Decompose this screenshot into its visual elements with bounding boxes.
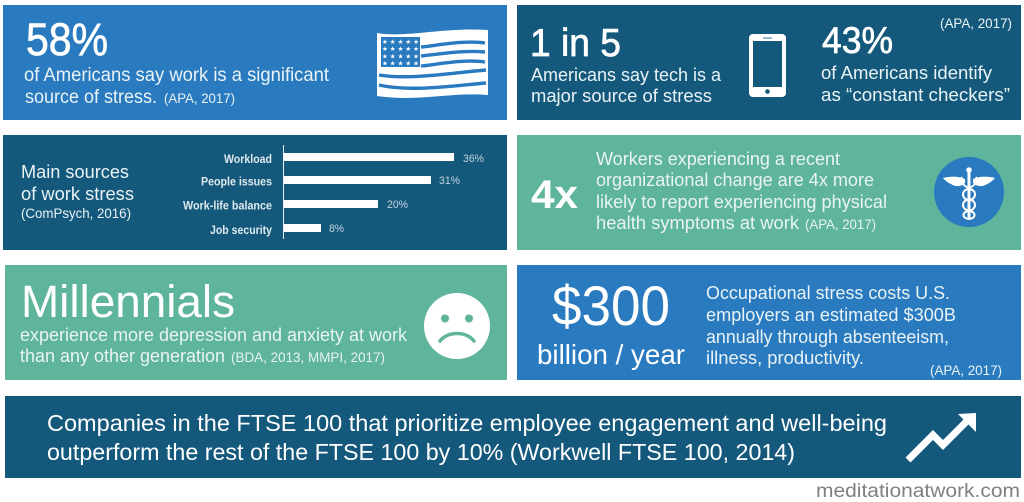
panel: 58% of Americans — [3, 5, 507, 120]
citation: (ComPsych, 2016) — [21, 206, 131, 221]
text: FTSE 100 statement: Companies in the FTSE 100 that prioritize employee engagement and well-being — [47, 410, 887, 436]
text: occupational stress cost: annually through absenteeism, — [706, 326, 949, 347]
citation: (APA, 2017) — [930, 363, 1002, 378]
panel: FTSE 100 — [5, 396, 1021, 478]
heading: Millennials: Millennials — [21, 276, 235, 327]
panel: cost of stress — [517, 265, 1021, 380]
text: organizational change: Workers experiencing a recent — [596, 148, 840, 169]
text: FTSE 100 statement: outperform the rest of the FTSE 100 by 10% (Workwell FTSE 100, 2014) — [47, 439, 795, 465]
footer: website: meditationatwork.com — [816, 481, 1020, 502]
stat: 58%: 58% — [26, 14, 108, 65]
text: constant checkers: of Americans identify — [821, 62, 993, 83]
icon: US flag — [377, 29, 488, 98]
icon: smartphone — [749, 34, 786, 97]
icon: US flag: ★★★★★ — [382, 38, 419, 46]
stat label: billion / year: billion / year — [537, 339, 685, 370]
text: occupational stress cost: illness, productivity. — [706, 347, 864, 368]
bar chart: Workload — [224, 154, 272, 166]
stat: 43%: 43% — [822, 20, 893, 61]
text: tech is a major source of stress: Americans say tech is a — [531, 64, 722, 85]
bar chart: People issues — [201, 176, 272, 188]
bar chart: 8% — [329, 223, 344, 235]
stat: 4x: 4x — [531, 173, 578, 217]
text: work is a source of stress: source of stress. — [25, 87, 157, 108]
text: organizational change: organizational change are 4x more — [596, 169, 874, 190]
bar chart — [183, 145, 484, 239]
bar chart: 20% — [387, 199, 408, 211]
citation: (BDA, 2013, MMPI, 2017) — [231, 350, 385, 365]
text: depression and anxiety: than any other generation — [20, 345, 225, 366]
heading: main sources: Main sources — [21, 161, 129, 182]
icon: caduceus — [934, 157, 1004, 227]
icon: US flag: ★★★★★ — [382, 45, 419, 53]
text: organizational change: health symptoms at work — [596, 212, 800, 233]
stat: $300: $300 — [552, 274, 670, 337]
icon: US flag: ★★★★★ — [382, 60, 419, 68]
bar chart: 36% — [463, 153, 484, 165]
panel: tech stress — [517, 5, 1021, 120]
text: occupational stress cost: employers an estimated $300B — [706, 304, 956, 325]
panel: main sources of work stress — [3, 135, 507, 250]
bar chart: 31% — [439, 175, 460, 187]
icon: rising arrow — [908, 413, 976, 460]
icon: sad face — [424, 293, 490, 359]
stat: 1 in 5: 1 in 5 — [530, 22, 621, 65]
bar chart: Job security — [210, 225, 273, 237]
text: organizational change: likely to report experiencing physical — [596, 191, 887, 212]
bar chart: Work-life balance — [183, 200, 272, 212]
text: constant checkers: as “constant checkers” — [821, 84, 1010, 105]
citation: (APA, 2017) — [940, 16, 1012, 31]
text: work is a source of stress: of Americans say work is a significant — [24, 65, 330, 86]
citation: (APA, 2017) — [805, 217, 876, 232]
panel: organizational change — [517, 135, 1021, 250]
citation: (APA, 2017) — [164, 91, 235, 106]
text: occupational stress cost: Occupational stress costs U.S. — [706, 282, 950, 303]
text: depression and anxiety: experience more depression and anxiety at work — [20, 324, 408, 345]
panel: millennials — [5, 265, 507, 380]
heading: main sources: of work stress — [21, 183, 134, 204]
text: tech is a major source of stress: major source of stress — [531, 85, 712, 106]
icon: US flag: ★★★★★ — [382, 52, 419, 60]
